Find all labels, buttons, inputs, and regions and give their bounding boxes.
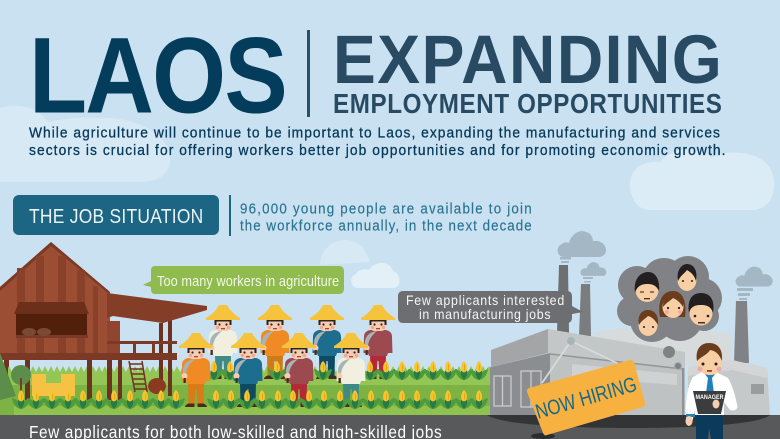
house body (0, 242, 110, 354)
heading: the job situation (13, 195, 219, 235)
bubble cloud (617, 256, 722, 342)
job situation text: 96,000 young people are available to join (240, 200, 532, 217)
farmers: back row (206, 305, 395, 379)
chimney left (557, 265, 569, 333)
right wing (688, 360, 770, 416)
mid field (0, 385, 490, 400)
intro paragraph: While agriculture will continue to be important to Laos, expanding the manufacturing and services (29, 125, 720, 142)
grass spikes (8, 364, 490, 372)
chimney middle (579, 284, 591, 336)
window awning (14, 302, 89, 314)
crops: back row (205, 361, 488, 380)
head (698, 347, 722, 375)
porch roof (107, 293, 207, 323)
cloud: right background (630, 149, 774, 210)
house stilts over grass (25, 364, 172, 400)
farm house (0, 242, 207, 406)
factory building (487, 328, 770, 416)
heading: the job situation: THE JOB SITUATION (29, 206, 203, 228)
porch railing (107, 341, 177, 354)
tie (704, 373, 716, 393)
ladder (129, 361, 147, 392)
face: woman bottom left (638, 310, 658, 336)
face: woman top (678, 264, 697, 291)
crops: front row (12, 390, 488, 409)
road band (0, 415, 780, 439)
title: EXPANDING: EXPANDING (333, 22, 722, 99)
thought bubble (617, 256, 722, 370)
smoke: left (558, 231, 606, 257)
back grass (8, 372, 490, 392)
manager figure: MANAGER (696, 394, 724, 401)
callout: too many workers: Too many workers in agriculture (157, 273, 339, 289)
porch wall (107, 321, 120, 354)
callout: few applicants manufacturing: Few applicants interested (406, 293, 564, 308)
callout: few applicants manufacturing: in manufacturing jobs (419, 307, 551, 322)
job situation text (240, 200, 532, 234)
now hiring sign (527, 337, 645, 439)
smoke: right (736, 267, 773, 286)
field background (0, 364, 490, 415)
floor beam (0, 353, 177, 360)
title divider (307, 30, 310, 117)
intro paragraph (29, 125, 725, 159)
back roof (593, 328, 732, 365)
centre roof (548, 329, 685, 368)
small white cloud (351, 263, 400, 288)
chimney right (734, 301, 749, 363)
window (16, 312, 87, 338)
face: man right (689, 293, 714, 326)
left upper roof (491, 329, 548, 367)
now hiring sign: NOW HIRING (533, 373, 639, 424)
crops: in front of back farmers (205, 361, 395, 380)
foreground field (0, 400, 490, 415)
face: woman centre (659, 291, 686, 318)
shirt (686, 372, 738, 423)
title: LAOS: LAOS (29, 15, 288, 136)
centre wall (550, 353, 684, 416)
left wall (487, 353, 550, 416)
callout: too many workers (143, 266, 344, 294)
intro paragraph: sectors is crucial for offering workers better job opportunities and for promoting economic growth. (29, 143, 725, 159)
smoke: middle (581, 262, 606, 276)
face: man left (635, 272, 659, 302)
job situation divider (229, 195, 231, 236)
trousers (696, 412, 723, 439)
cloud: small behind bubble (320, 240, 370, 265)
cloud: left background (0, 106, 170, 182)
manager figure (686, 343, 738, 439)
callout: few applicants manufacturing (398, 291, 583, 323)
subtitle: EMPLOYMENT OPPORTUNITIES: EMPLOYMENT OPPORTUNITIES (333, 90, 722, 119)
factory ground shadow (487, 415, 770, 428)
tree (0, 353, 31, 400)
stilts (4, 320, 172, 406)
job situation text: the workforce annually, in the next decade (240, 217, 532, 234)
factory windows (494, 371, 541, 407)
hay bales (32, 374, 75, 396)
title block (29, 15, 722, 136)
clay pot (148, 378, 166, 394)
farmers: front row (179, 333, 368, 407)
factory chimneys and smoke (557, 231, 773, 363)
clipboard (693, 391, 726, 414)
